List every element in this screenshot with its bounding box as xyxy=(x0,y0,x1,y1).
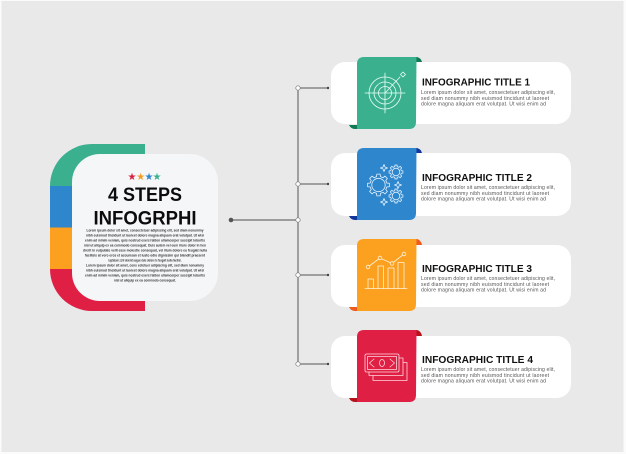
panel: step 2 xyxy=(331,148,571,220)
panel: main intro xyxy=(50,144,218,311)
icon: target with arrow xyxy=(365,72,406,113)
description 2 xyxy=(421,185,555,202)
intro paragraph: Lorem ipsum dolor sit amet, cons ectetuer adipiscing elit, sed diam nonummy xyxy=(86,262,205,268)
description 3: dolore magna aliquam erat volutpat. Ut wisi enim ad xyxy=(421,288,546,294)
icon: four stars xyxy=(128,173,161,180)
description 4: sed diam nonummy nibh euismod tincidunt ut laoreet xyxy=(421,373,550,379)
intro paragraph: enim ad minim veniam, quis nostrud exerci tation ullamcorper suscipit lobortis xyxy=(85,238,206,242)
coloured tab 4 xyxy=(349,330,422,402)
description 2: sed diam nonummy nibh euismod tincidunt ut laoreet xyxy=(421,191,550,197)
title 1: INFOGRAPHIC TITLE 1 xyxy=(422,78,530,88)
intro paragraph: nisl ut aliquip ex ea commodo consequat. Duis autem vel eum iriure dolor in hen xyxy=(84,242,206,248)
white card 1 xyxy=(331,62,571,124)
description 3: sed diam nonummy nibh euismod tincidunt ut laoreet xyxy=(421,282,550,288)
white card 3 xyxy=(331,245,571,307)
description 3: Lorem ipsum dolor sit amet, consectetuer adipiscing elit, xyxy=(421,276,555,282)
intro paragraph: nisl ut aliquip ex ea commodo consequat. xyxy=(114,278,176,282)
description 4 xyxy=(421,367,555,384)
description 1 xyxy=(421,90,555,108)
description 1: Lorem ipsum dolor sit amet, consectetuer adipiscing elit, xyxy=(421,90,555,96)
description 2: Lorem ipsum dolor sit amet, consectetuer adipiscing elit, xyxy=(421,185,555,191)
white card 2 xyxy=(331,153,571,216)
description 4: dolore magna aliquam erat volutpat. Ut wisi enim ad xyxy=(421,378,546,384)
coloured tab 3 xyxy=(349,239,422,311)
icon: gears xyxy=(368,164,403,206)
title 2: INFOGRAPHIC TITLE 2 xyxy=(422,173,532,184)
description 3 xyxy=(421,276,555,294)
icon: growth chart xyxy=(365,252,407,288)
coloured backing bands xyxy=(50,144,145,311)
intro paragraph: luptatum zzril delenit augue duis dolore te feugait nulla facilisi. xyxy=(108,258,182,262)
intro paragraph: Lorem ipsum dolor sit amet, consectetuer adipiscing elit, sed diam nonummy xyxy=(86,228,204,232)
intro paragraph: facilisis at vero eros et accumsan et iusto odio dignissim qui blandit praesent xyxy=(85,252,206,258)
panel: step 4 xyxy=(331,330,571,402)
coloured tab 2 xyxy=(349,148,422,220)
title 4: INFOGRAPHIC TITLE 4 xyxy=(422,355,533,366)
intro paragraph: drerit in vulputate velit esse molestie consequat, vel illum dolore eu feugiat nulla xyxy=(83,248,208,252)
intro paragraph xyxy=(83,228,208,282)
panel: step 3 xyxy=(331,239,571,311)
description 2: dolore magna aliquam erat volutpat. Ut wisi enim ad xyxy=(421,196,546,202)
white main card xyxy=(72,154,218,301)
description 1: sed diam nonummy nibh euismod tincidunt ut laoreet xyxy=(421,96,550,102)
title 3: INFOGRAPHIC TITLE 3 xyxy=(422,264,532,275)
description 4: Lorem ipsum dolor sit amet, consectetuer adipiscing elit, xyxy=(421,367,555,373)
description 1: dolore magna aliquam erat volutpat. Ut wisi enim ad xyxy=(421,102,546,108)
panel: step 1 xyxy=(331,57,571,129)
intro paragraph: enim ad minim veniam, quis nostrud exerci tation ullamcorper suscipit lobortis xyxy=(85,272,206,278)
intro paragraph: nibh euismod tincidunt ut laoreet dolore magna aliquam erat volutpat. Ut wisi xyxy=(86,232,204,238)
heading xyxy=(94,185,196,230)
coloured tab 1 xyxy=(349,57,422,129)
heading: 4 STEPS xyxy=(108,185,182,206)
icon: banknotes xyxy=(365,354,407,380)
white card 4 xyxy=(331,336,571,398)
heading: INFOGRPHI xyxy=(94,208,196,230)
intro paragraph: nibh euismod tincidunt ut laoreet dolore magna aliquam erat volutpat. Ut wisi xyxy=(86,268,204,272)
connector lines xyxy=(229,86,329,366)
